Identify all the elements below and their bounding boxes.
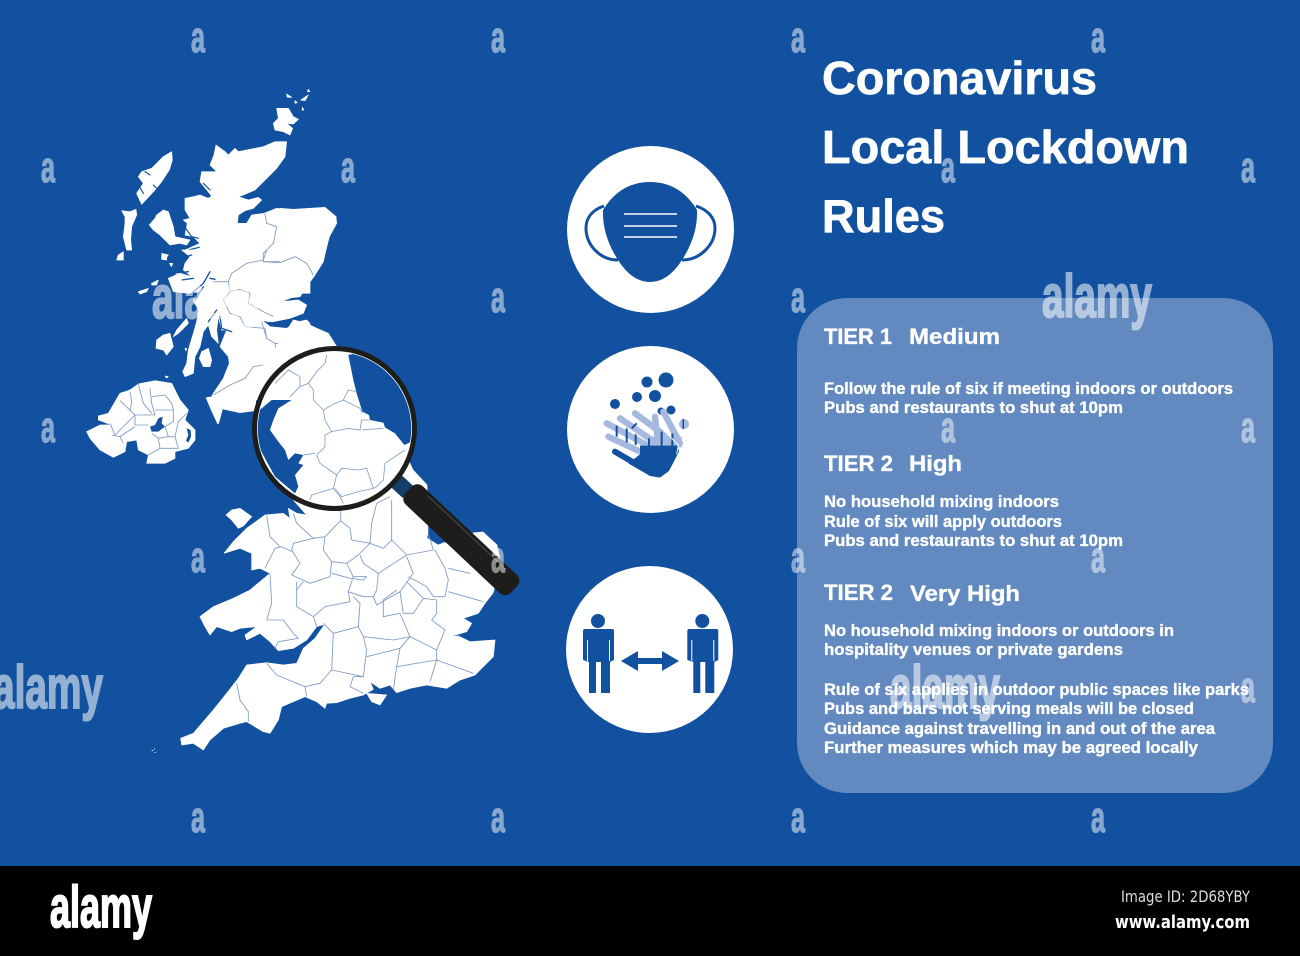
icon: face mask	[567, 146, 734, 313]
tier 3: Rule of six applies in outdoor public spaces like parks	[824, 681, 1249, 699]
panel: tier rules	[797, 298, 1273, 793]
tier 3: hospitality venues or private gardens	[824, 641, 1123, 659]
England and Wales	[152, 433, 500, 753]
back hand	[607, 412, 680, 452]
watermarks: a	[491, 793, 505, 842]
watermarks: a	[41, 403, 55, 452]
watermarks: a	[791, 13, 805, 62]
Scilly dots	[152, 749, 156, 753]
watermarks: a	[191, 793, 205, 842]
northern Highlands and Hebrides	[117, 142, 290, 260]
image id: Image ID: 2D68YBY	[1121, 887, 1250, 906]
tier 3: Very High	[910, 581, 1020, 606]
tier 3: Pubs and bars not serving meals will be closed	[824, 700, 1194, 718]
tier 1: Medium	[909, 324, 1000, 349]
lens county boundaries	[275, 355, 405, 503]
hand stripes	[617, 423, 672, 447]
watermarks: a	[941, 143, 955, 192]
watermarks: a	[1091, 793, 1105, 842]
tier 1: Follow the rule of six if meeting indoors or outdoors	[824, 380, 1233, 398]
watermarks: a	[191, 13, 205, 62]
watermarks: a	[1241, 663, 1255, 712]
Solway coast	[207, 395, 255, 423]
map of the UK	[87, 89, 500, 753]
lens	[253, 348, 415, 508]
central Scotland and Clyde	[138, 250, 310, 400]
watermarks: a	[791, 533, 805, 582]
icon: hand washing	[567, 346, 734, 513]
watermarks: a	[1241, 403, 1255, 452]
tier 1: TIER 1	[824, 324, 892, 349]
eastern Scotland and north-east England	[253, 89, 367, 417]
tier 3: No household mixing indoors or outdoors in	[824, 622, 1174, 640]
watermarks: a	[341, 143, 355, 192]
watermarks: a	[791, 273, 805, 322]
watermarks: a	[491, 13, 505, 62]
tier 2: High	[909, 451, 962, 476]
tier 2: Rule of six will apply outdoors	[824, 513, 1062, 531]
handle	[400, 481, 523, 599]
watermarks: alamy	[1042, 263, 1152, 330]
title	[822, 52, 1189, 242]
footer logo: alamy	[50, 875, 152, 940]
tier 3: Guidance against travelling in and out of the area	[824, 720, 1216, 738]
watermarks: alamy	[890, 654, 1000, 721]
watermarks: a	[191, 533, 205, 582]
footer bar	[0, 866, 1300, 956]
left person	[583, 614, 614, 693]
tier 1: Pubs and restaurants to shut at 10pm	[824, 399, 1123, 417]
watermarks: a	[1241, 143, 1255, 192]
magnifying glass	[253, 348, 523, 599]
website: www.alamy.com	[1115, 912, 1250, 933]
watermarks: a	[1091, 533, 1105, 582]
watermarks: a	[791, 793, 805, 842]
watermarks: a	[491, 273, 505, 322]
front hand	[628, 446, 679, 478]
Anglesey	[226, 508, 252, 528]
watermarks: a	[41, 143, 55, 192]
county boundaries	[237, 497, 483, 722]
title: Rules	[822, 190, 945, 242]
soap bubbles	[610, 372, 689, 429]
handle connector	[394, 479, 408, 492]
title: Coronavirus	[822, 52, 1097, 104]
double arrow	[621, 651, 679, 671]
watermarks: a	[491, 533, 505, 582]
right person	[687, 614, 718, 693]
title: Local Lockdown	[822, 121, 1189, 173]
lens sea areas	[253, 350, 415, 493]
Isle of Wight	[367, 693, 387, 705]
tier 2: Pubs and restaurants to shut at 10pm	[824, 532, 1123, 550]
watermarks: a	[1091, 13, 1105, 62]
watermarks: alamy	[152, 264, 262, 331]
Northern Ireland	[87, 381, 195, 463]
watermarks: a	[941, 403, 955, 452]
icon: social distancing	[566, 566, 733, 733]
tier 2: No household mixing indoors	[824, 493, 1059, 511]
tier 3: Further measures which may be agreed locally	[824, 739, 1199, 757]
tier 2	[824, 451, 1123, 550]
tier 3: TIER 2	[824, 580, 893, 605]
tier 3	[824, 580, 1249, 757]
tier 1	[824, 324, 1233, 417]
tier 2: TIER 2	[824, 451, 893, 476]
